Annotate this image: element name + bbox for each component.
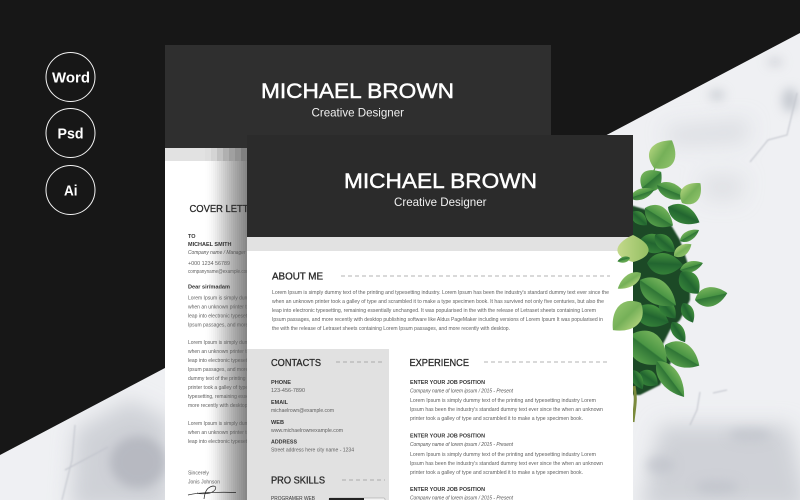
badge: Psd	[46, 108, 95, 158]
experience section: EXPERIENCE	[410, 358, 469, 369]
letter body: more recently with desktop	[188, 403, 248, 409]
experience section	[410, 358, 610, 500]
cover letter heading: COVER LETTER	[190, 204, 262, 215]
job entry 2: Ipsum has been the industry's standard dummy text ever since the when an unknown	[410, 461, 603, 467]
back page grey band	[165, 148, 551, 161]
about me section: when an unknown printer took a galley of type and scrambled it to make a type specimen book. It has survived not only five centuries, but also the	[272, 299, 604, 305]
front page header: MICHAEL BROWN	[344, 170, 537, 193]
sign-off: Sincerely	[188, 470, 209, 476]
job entry 2: printer took a galley of type and scrambled it to make a type specimen book.	[410, 470, 583, 476]
front page header	[247, 135, 633, 237]
letter body: Lorem Ipsum is simply dummy text	[188, 421, 266, 427]
about me section: Ipsum passages, and more recently with desktop publishing software like Aldus PageMaker including versions of Lorem Ipsum It was popularised in	[272, 317, 603, 323]
about me section: ABOUT ME	[272, 272, 323, 282]
about me section: the with the release of Letraset sheets containing Lorem Ipsum passages, and more recently with desktop.	[272, 326, 510, 332]
job entry 2	[410, 434, 603, 476]
letter body: leap into electronic typesetting	[188, 358, 255, 364]
letter body: when an unknown printer took	[188, 349, 255, 355]
front page: resume	[247, 135, 633, 500]
pro skills: PRO SKILLS	[271, 476, 325, 486]
letter body: Lorem Ipsum is simply dummy text	[188, 340, 266, 346]
back page: cover letter	[165, 45, 551, 500]
back page header	[165, 45, 551, 148]
job entry 2: ENTER YOUR JOB POSITION	[410, 434, 485, 440]
badge: Ai	[46, 166, 95, 214]
plant behind the resume	[620, 133, 729, 422]
contacts panel: Street address here city name - 1234	[271, 448, 354, 454]
recipient details: +000 1234 56789	[188, 261, 230, 267]
about me section	[272, 272, 610, 332]
job entry 1: Company name of lorem ipsum / 2015 - Present	[410, 388, 514, 394]
recipient details: companyname@example.com	[188, 269, 250, 275]
job entry 2: Company name of lorem ipsum / 2015 - Present	[410, 442, 514, 448]
recipient details: Company name / Manager	[188, 250, 246, 256]
plant leaves over the resume	[604, 235, 650, 340]
letter body: leap into electronic typesetting	[188, 439, 255, 445]
recipient details	[188, 234, 250, 275]
letter body: Lorem Ipsum is simply dummy text	[188, 296, 266, 302]
contacts panel: ADDRESS	[271, 440, 297, 446]
contacts panel: 123-456-7890	[271, 388, 305, 394]
sign-off: Jonis Johnson	[188, 480, 220, 486]
contacts panel: michaelrown@example.com	[271, 408, 334, 414]
recipient details: MICHAEL SMITH	[188, 242, 232, 248]
badge: Word	[46, 52, 95, 102]
badge: Ai: Ai	[64, 182, 78, 200]
job entry 3: ENTER YOUR JOB POSITION	[410, 487, 485, 493]
letter body: dummy text of the printing	[188, 376, 246, 382]
job entry 1: Ipsum has been the industry's standard dummy text ever since the when an unknown	[410, 407, 603, 413]
contacts panel: CONTACTS	[271, 358, 321, 369]
job entry 1	[410, 380, 603, 422]
format badges	[46, 52, 95, 214]
job entry 1: Lorem Ipsum is simply dummy text of the printing and typesetting industry Lorem	[410, 398, 596, 404]
recipient details: TO	[188, 234, 196, 240]
letter body: typesetting, remaining essentially	[188, 394, 262, 400]
contacts panel: www.michaelrownexample.com	[271, 428, 343, 434]
contacts panel	[247, 349, 389, 500]
letter body: when an unknown printer took	[188, 304, 255, 310]
back page paper with shadow from the front page	[165, 161, 551, 500]
front page header: Creative Designer	[394, 195, 486, 209]
about me section: leap into electronic typesetting, remaining essentially unchanged. It was popularised in the with the release of Letraset sheets containing Lorem	[272, 308, 596, 314]
job entry 2: Lorem Ipsum is simply dummy text of the printing and typesetting industry Lorem	[410, 452, 596, 458]
letter body	[188, 284, 266, 445]
letter body: printer took a galley of type	[188, 385, 248, 391]
pro skills	[271, 476, 385, 500]
back page header: MICHAEL BROWN	[261, 80, 454, 103]
contacts panel: PHONE	[271, 380, 291, 386]
contacts panel: EMAIL	[271, 400, 289, 406]
letter body: Ipsum passages, and more	[188, 367, 249, 373]
job entry 3	[410, 487, 514, 500]
front page grey band	[247, 237, 633, 251]
job entry 1: ENTER YOUR JOB POSITION	[410, 380, 485, 386]
letter body: Dear sir/madam	[188, 284, 230, 290]
job entry 1: printer took a galley of type and scrambled it to make a type specimen book.	[410, 416, 583, 422]
about me section: Lorem Ipsum is simply dummy text of the printing and typesetting industry. Lorem Ipsum has been the industry's standard dummy text ever since the	[272, 290, 609, 296]
sign-off	[188, 470, 236, 499]
letter body: Ipsum passages, and more	[188, 322, 249, 328]
letter body: leap into electronic typesetting	[188, 314, 255, 320]
contacts panel: WEB	[271, 420, 284, 426]
back page header: Creative Designer	[312, 106, 404, 120]
badge: Psd: Psd	[58, 126, 84, 142]
badge: Word: Word	[52, 70, 90, 86]
letter body: when an unknown printer took	[188, 430, 255, 436]
